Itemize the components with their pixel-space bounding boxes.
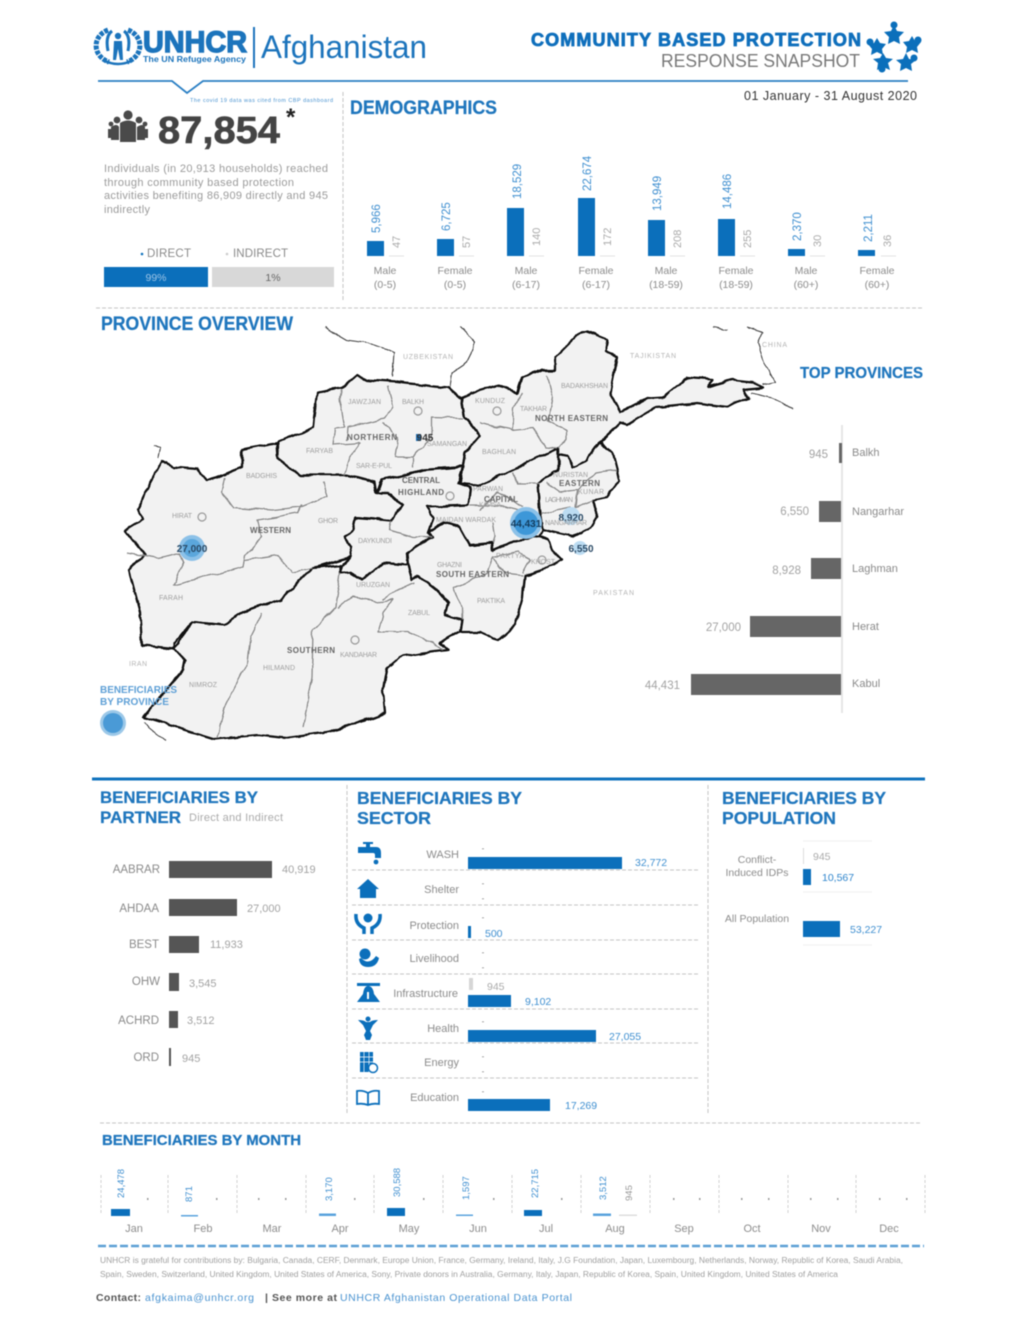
province labels: NURISTAN	[553, 472, 588, 479]
icon: people	[108, 110, 148, 142]
panel: headline figure	[104, 98, 334, 287]
source note: The covid 19 data was cited from CBP dashboard	[190, 98, 333, 104]
province labels: NIMROZ	[189, 682, 218, 689]
bar chart: months	[111, 1168, 908, 1235]
province labels: GHOR	[318, 518, 338, 525]
bar chart: sectors: -	[482, 1067, 485, 1076]
province labels: PAKTIKA	[477, 598, 505, 605]
bar chart: top provinces: Balkh	[852, 447, 880, 459]
province labels: KAPISA	[479, 502, 501, 509]
footer: contact: UNHCR Afghanistan Operational Data Portal	[340, 1292, 572, 1304]
bar chart: demographics: (6-17)	[582, 279, 610, 291]
bar chart: months: 3,512	[598, 1176, 609, 1200]
bar chart: demographics: (60+)	[794, 279, 818, 291]
bar chart: population: Induced IDPs	[725, 867, 789, 879]
description: activities benefiting 86,909 directly and 945	[104, 190, 328, 202]
bar chart: partners: 11,933	[210, 939, 243, 951]
footer: donors: UNHCR is grateful for contributions by: Bulgaria, Canada, CERF, Denmark, Europe Union, France, Germany, Ireland, Italy, J.G Foundation, Japan, Luxembourg, Netherlands, Norway, Republic of Korea, Saudi Arabia,	[100, 1256, 903, 1265]
map boundaries	[125, 327, 792, 740]
bar chart: months: 3,170	[324, 1177, 335, 1201]
bar chart: months: Oct	[743, 1223, 761, 1235]
bar chart: months: May	[399, 1223, 420, 1235]
bar chart: demographics: 255	[742, 230, 754, 248]
footer: contact	[96, 1292, 572, 1304]
legend: direct and indirect: DIRECT	[147, 248, 191, 260]
stacked share bar: 1%	[265, 272, 281, 284]
neighbouring borders	[143, 327, 792, 740]
province labels: BAGHLAN	[482, 449, 516, 456]
bar chart: sectors: -	[482, 879, 485, 888]
bar chart: months: 30,588	[392, 1168, 403, 1197]
reporting period: 01 January - 31 August 2020	[744, 89, 917, 103]
province labels: KUNAR	[578, 489, 604, 496]
country labels: IRAN	[129, 661, 147, 668]
tagline: The UN Refugee Agency	[143, 54, 246, 64]
bar chart: population: 945	[813, 851, 831, 863]
bar chart: partners: 3,545	[189, 978, 217, 990]
bar chart: sectors: -	[482, 894, 485, 903]
bar chart: demographics: Male	[515, 265, 538, 277]
icon: protection	[356, 914, 380, 934]
region labels: CENTRAL	[402, 476, 440, 485]
icon: WASH tap	[358, 842, 381, 864]
heading: DEMOGRAPHICS	[350, 98, 497, 119]
bar chart: months: 24,478	[116, 1169, 127, 1198]
province labels: NANGARHAR	[545, 520, 587, 527]
bar chart: top provinces	[645, 425, 904, 713]
province labels: DAYKUNDI	[358, 538, 392, 545]
bar chart: sectors: -	[482, 963, 485, 972]
bar chart: demographics: 140	[531, 228, 543, 246]
region labels: SOUTHERN	[287, 646, 335, 655]
icon: stars	[866, 22, 922, 72]
bubble: Balkh: 945	[417, 433, 434, 444]
bar chart: population: Conflict-	[738, 854, 777, 866]
bar chart: demographics: 14,486	[722, 174, 734, 209]
bar chart: demographics	[367, 155, 896, 291]
province labels: ZABUL	[408, 610, 430, 617]
heading: BENEFICIARIES BY	[357, 788, 522, 808]
bar chart: population	[725, 841, 882, 945]
bar chart: sectors: 32,772	[635, 857, 667, 869]
country name: Afghanistan	[261, 29, 427, 65]
bar chart: sectors: Energy	[424, 1057, 459, 1069]
header	[96, 22, 921, 103]
map legend	[100, 685, 177, 736]
bar chart: partners: ORD	[133, 1052, 159, 1064]
bar chart: sectors: -	[482, 913, 485, 922]
bar chart: top provinces: Nangarhar	[852, 506, 904, 518]
heading: TOP PROVINCES	[800, 365, 923, 382]
province labels: MAIDAN WARDAK	[436, 517, 496, 524]
bar chart: months: 1,597	[461, 1176, 472, 1200]
region labels: HIGHLAND	[398, 488, 444, 497]
bar chart: sectors: -	[482, 948, 485, 957]
bar chart: months: Mar	[263, 1223, 282, 1235]
footer: contact: Contact:	[96, 1292, 141, 1304]
footer: donors: Spain, Sweden, Switzerland, United Kingdom, United States of America, Sony, Private donors in Australia, Germany, Italy, Japan, Republic of Korea, Spain, United Kingdom, United States of America	[100, 1270, 839, 1279]
description: through community based protection	[104, 177, 294, 189]
bar chart: months: Jan	[125, 1223, 143, 1235]
bar chart: months: 945	[624, 1185, 635, 1201]
icon: health	[358, 1016, 378, 1040]
bar chart: months: Dec	[879, 1223, 899, 1235]
heading: BENEFICIARIES BY	[100, 788, 259, 807]
region labels: CAPITAL	[484, 495, 518, 504]
bar chart: sectors: Shelter	[424, 884, 459, 896]
bar chart: sectors: 945	[487, 981, 505, 993]
bar chart: demographics: 22,674	[582, 155, 594, 191]
wordmark: UNHCR: UNHCR	[143, 26, 247, 59]
panel: beneficiaries by population: POPULATION	[722, 808, 836, 828]
bar chart: demographics: (18-59)	[719, 279, 753, 291]
bar chart: months: Jun	[469, 1223, 487, 1235]
country labels: PAKISTAN	[593, 590, 634, 597]
bar chart: months: Jul	[539, 1223, 553, 1235]
asterisk: *	[286, 104, 296, 131]
bar chart: demographics: 2,370	[792, 212, 804, 241]
bar chart: population: All Population	[725, 913, 789, 925]
heading: BENEFICIARIES BY	[722, 788, 886, 808]
heading: province overview: PROVINCE OVERVIEW	[101, 314, 293, 335]
bar chart: sectors: -	[482, 1017, 485, 1026]
icon: shelter	[357, 879, 379, 898]
bar chart: sectors: Livelihood	[409, 953, 459, 965]
bar chart: top provinces: 6,550	[780, 506, 809, 518]
bubble: Laghman	[558, 507, 584, 525]
bar chart: sectors: WASH	[426, 849, 459, 861]
bar chart: demographics: (0-5)	[374, 279, 396, 291]
panel: beneficiaries by population	[722, 788, 886, 945]
bar chart: partners: ACHRD	[118, 1015, 159, 1027]
bar chart: sectors: Protection	[409, 920, 459, 932]
bar chart: demographics: 47	[391, 236, 403, 248]
bar chart: partners: 27,000	[247, 903, 281, 915]
report subtitle: RESPONSE SNAPSHOT	[661, 50, 860, 71]
bar chart: demographics: 5,966	[371, 204, 383, 233]
province labels: HILMAND	[263, 665, 295, 672]
bar chart: sectors: -	[482, 1087, 485, 1096]
map: Afghanistan provinces	[100, 327, 792, 740]
description: Individuals (in 20,913 households) reached	[104, 163, 328, 175]
region labels: EASTERN	[559, 479, 600, 488]
province labels: URUZGAN	[356, 582, 390, 589]
regions	[125, 332, 763, 739]
bar chart: demographics: Female	[578, 265, 614, 277]
bubble: Kabul: 44,431	[511, 519, 542, 530]
province labels: SAR-E-PUL	[356, 463, 392, 470]
country labels: CHINA	[762, 342, 787, 349]
bubble: Kabul	[510, 507, 542, 539]
bar chart: top provinces: 44,431	[645, 680, 680, 692]
bar chart: demographics: 13,949	[652, 176, 664, 211]
bubble: Herat	[177, 535, 208, 561]
bar chart: top provinces: 27,000	[706, 622, 741, 634]
icon: infrastructure	[357, 983, 380, 1002]
panel: beneficiaries by sector	[352, 788, 700, 1112]
province labels: FARYAB	[306, 448, 333, 455]
bar chart: months: Sep	[674, 1223, 694, 1235]
bar chart: population: 53,227	[850, 924, 882, 936]
country labels: TAJIKISTAN	[630, 353, 676, 360]
province labels: PARWAN	[473, 486, 503, 493]
legend: direct and indirect: INDIRECT	[233, 248, 288, 260]
province labels: BADAKHSHAN	[561, 383, 608, 390]
bar chart: partners: 40,919	[282, 864, 316, 876]
bubble: Herat: 27,000	[177, 544, 208, 555]
province labels: KUNDUZ	[475, 398, 506, 405]
province labels: PAKTYA	[496, 553, 524, 560]
panel: demographics	[350, 98, 896, 291]
panel: top provinces	[645, 365, 923, 713]
province labels: KANDAHAR	[340, 652, 377, 659]
bar chart: partners: OHW	[132, 976, 160, 988]
province labels: HIRAT	[172, 513, 193, 520]
province labels: TAKHAR	[520, 406, 547, 413]
heading: BENEFICIARIES BY MONTH	[102, 1132, 301, 1149]
province labels: BALKH	[402, 399, 424, 406]
bar chart: sectors	[393, 844, 667, 1112]
total beneficiaries: 87,854	[158, 110, 280, 152]
province boundaries	[127, 375, 617, 738]
bar chart: demographics: 57	[461, 236, 473, 248]
panel: beneficiaries by sector: SECTOR	[357, 808, 431, 828]
footer: contact: | See more at	[265, 1292, 338, 1304]
bar chart: demographics: Female	[437, 265, 473, 277]
bar chart: demographics: (60+)	[865, 279, 889, 291]
bar chart: sectors: -	[482, 1052, 485, 1061]
report title: COMMUNITY BASED PROTECTION	[531, 30, 861, 50]
bar chart: demographics: 172	[602, 228, 614, 246]
bar chart: partners: 3,512	[187, 1015, 215, 1027]
subheading: Direct and Indirect	[189, 812, 283, 824]
icon: education	[357, 1091, 379, 1105]
panel: beneficiaries by partner: PARTNER	[100, 808, 181, 827]
province labels	[159, 383, 608, 689]
bar chart: top provinces: Herat	[852, 621, 879, 633]
bar chart: demographics: (18-59)	[649, 279, 683, 291]
bar chart: demographics: Male	[795, 265, 818, 277]
bar chart: demographics: Male	[374, 265, 397, 277]
bar chart: population: 10,567	[822, 872, 854, 884]
bar chart: demographics: (0-5)	[444, 279, 466, 291]
province labels: BADGHIS	[246, 473, 277, 480]
bar chart: top provinces: 945	[809, 449, 828, 461]
bar chart: demographics: Female	[859, 265, 895, 277]
bar chart: months: Feb	[194, 1223, 212, 1235]
bar chart: demographics: Female	[718, 265, 754, 277]
bar chart: months: 22,715	[530, 1169, 541, 1198]
panel: beneficiaries by partner	[100, 788, 316, 1066]
legend: direct and indirect	[141, 248, 288, 260]
region labels	[250, 414, 608, 655]
bar chart: sectors: -	[482, 844, 485, 853]
stacked share bar	[104, 267, 334, 287]
bar chart: demographics: (6-17)	[512, 279, 540, 291]
country labels: UZBEKISTAN	[403, 354, 453, 361]
bar chart: sectors: 17,269	[565, 1100, 597, 1112]
province labels: FARAH	[159, 595, 183, 602]
bar chart: months: 871	[184, 1186, 195, 1202]
bar chart: sectors: Health	[427, 1023, 459, 1035]
icon: energy	[360, 1052, 378, 1072]
bar chart: months: Aug	[605, 1223, 625, 1235]
bar chart: sectors: 500	[485, 928, 503, 940]
bar chart: demographics: 6,725	[441, 202, 453, 231]
panel: beneficiaries by month	[101, 1132, 925, 1235]
province labels: KHOST	[531, 559, 556, 566]
bar chart: months: Nov	[811, 1223, 831, 1235]
bar chart: partners: AHDAA	[119, 903, 159, 915]
bar chart: demographics: 36	[882, 235, 894, 247]
stacked share bar: 99%	[145, 272, 167, 284]
province labels: SAMANGAN	[427, 441, 467, 448]
region labels: SOUTH EASTERN	[436, 570, 509, 579]
bar chart: top provinces: Kabul	[852, 678, 880, 690]
province labels: LAGHMAN	[545, 497, 573, 504]
region labels: WESTERN	[250, 526, 291, 535]
bar chart: top provinces: 8,928	[772, 565, 801, 577]
bar chart: partners	[113, 861, 316, 1066]
bar chart: partners: BEST	[129, 939, 159, 951]
map legend: BY PROVINCE	[100, 697, 169, 708]
bar chart: partners: AABRAR	[113, 864, 160, 876]
bar chart: months: Apr	[331, 1223, 349, 1235]
bar chart: sectors: 27,055	[609, 1031, 641, 1043]
province labels: GHAZNI	[437, 562, 462, 569]
icon: livelihood	[359, 948, 379, 967]
region labels: NORTHERN	[347, 433, 397, 442]
bubble: Nangarhar: 6,550	[568, 544, 594, 555]
header rule with pointer	[98, 81, 908, 93]
icon: UNHCR logo	[96, 30, 140, 64]
bar chart: sectors: Education	[410, 1092, 459, 1104]
bar chart: partners: 945	[182, 1053, 200, 1065]
bar chart: sectors: 9,102	[525, 996, 551, 1008]
bar chart: sectors: Infrastructure	[393, 988, 458, 1000]
bubble: Laghman: 8,920	[558, 513, 584, 524]
bar chart: demographics: 2,211	[863, 214, 875, 242]
province capitals	[198, 407, 546, 644]
bar chart: demographics: 208	[672, 230, 684, 248]
bar chart: demographics: Male	[655, 265, 678, 277]
bar chart: demographics: 30	[812, 235, 824, 247]
province labels: JAWZJAN	[348, 399, 381, 406]
bar chart: demographics: 18,529	[512, 164, 524, 199]
footer: contact: afgkaima@unhcr.org	[145, 1292, 254, 1304]
country labels	[129, 342, 787, 668]
bar chart: top provinces: Laghman	[852, 563, 898, 575]
description: indirectly	[104, 204, 150, 216]
map legend: BENEFICIARIES	[100, 685, 177, 696]
region labels: NORTH EASTERN	[535, 414, 608, 423]
